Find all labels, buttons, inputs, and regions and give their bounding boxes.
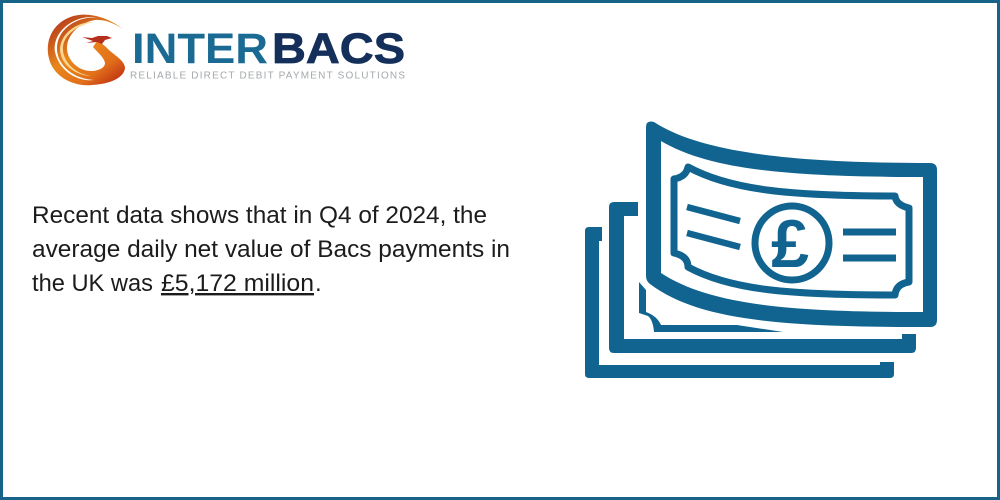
right value lines bbox=[843, 232, 896, 258]
logo tagline: RELIABLE DIRECT DEBIT PAYMENT SOLUTIONS bbox=[130, 70, 405, 82]
logo wordmark: INTER bbox=[132, 25, 268, 73]
body text: average daily net value of Bacs payments in bbox=[32, 236, 510, 263]
logo bbox=[48, 15, 405, 85]
inner scalloped frame bbox=[674, 167, 909, 295]
body text: . bbox=[315, 270, 322, 297]
logo emblem: phoenix swirl bbox=[48, 15, 125, 85]
body text bbox=[32, 202, 510, 297]
logo wordmark: BACS bbox=[272, 25, 405, 73]
front banknote outline bbox=[646, 122, 937, 327]
body text: Recent data shows that in Q4 of 2024, the bbox=[32, 202, 487, 229]
body text: the UK was bbox=[32, 270, 153, 297]
middle banknote bbox=[609, 202, 916, 353]
pound symbol: £ bbox=[771, 206, 809, 282]
partial banknote frame bbox=[639, 282, 783, 332]
body text: £5,172 million bbox=[161, 270, 314, 297]
pound coin circle bbox=[755, 206, 829, 280]
logo wordmark bbox=[132, 25, 405, 73]
back banknote bbox=[585, 227, 894, 378]
left value lines bbox=[687, 207, 740, 247]
icon: banknotes with pound sign bbox=[585, 122, 937, 378]
